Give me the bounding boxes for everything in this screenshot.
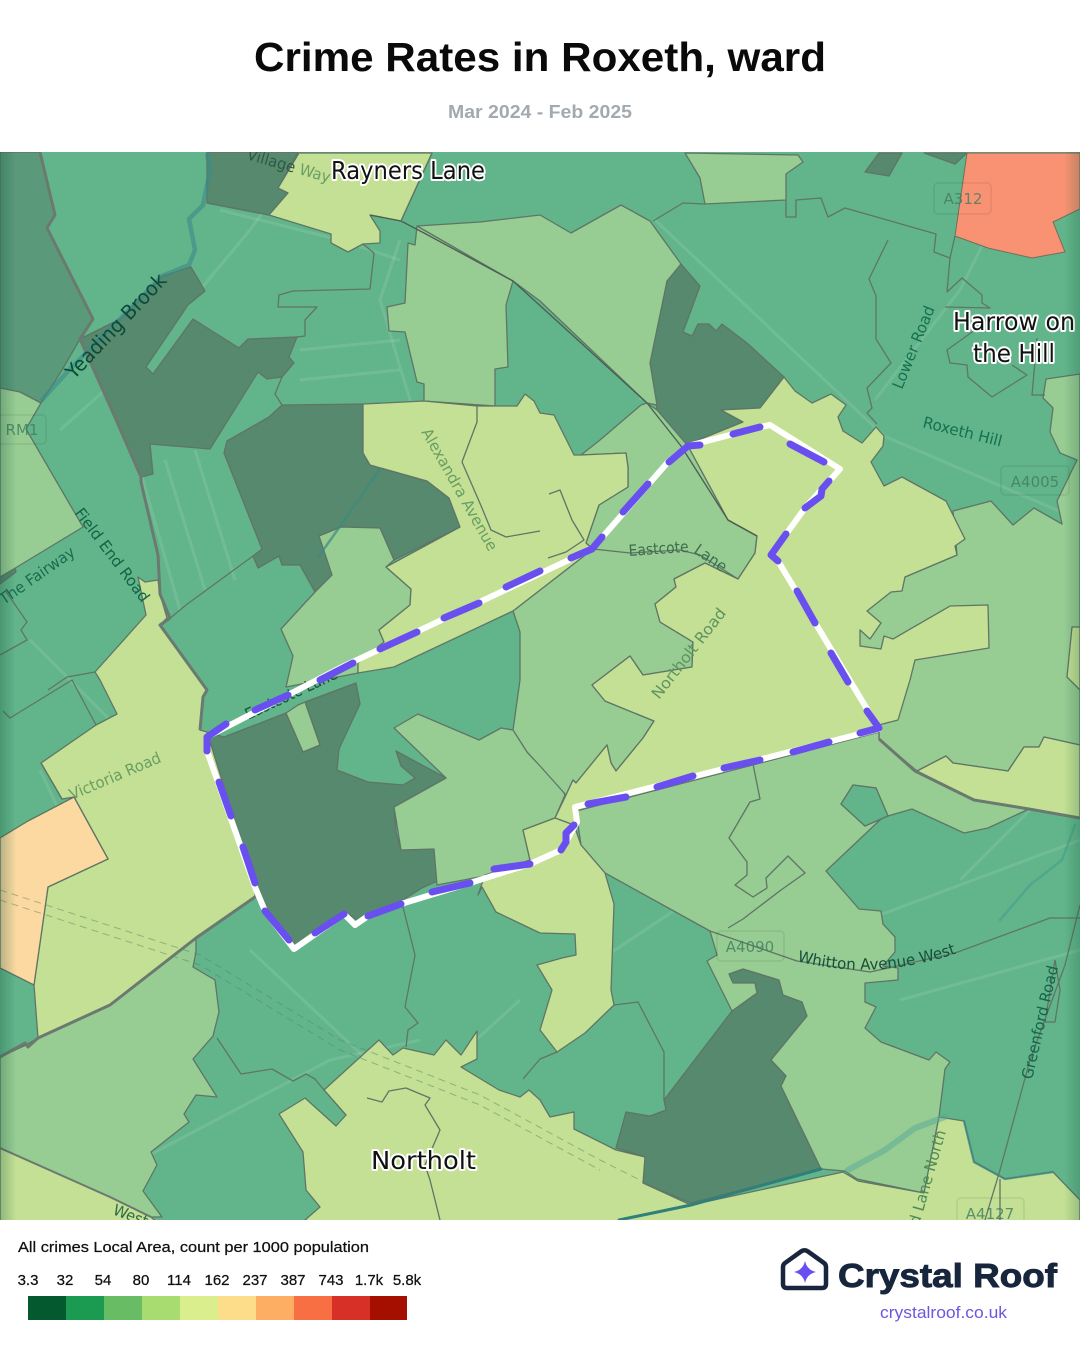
legend scale labels: 743 — [318, 1272, 344, 1289]
road label: Lower Road: Lower Road — [889, 303, 939, 391]
water: Yeading Brook — [41, 153, 210, 401]
legend scale labels: 237 — [242, 1272, 268, 1289]
legend scale labels: 387 — [280, 1272, 306, 1289]
thick borough boundary lines — [0, 152, 1080, 1217]
road label: Village Way: Village Way — [245, 146, 333, 187]
place label: Harrow on the Hill: the Hill — [973, 339, 1055, 368]
road label: Eastcote Lane east — [630, 542, 726, 572]
road badge: A4090: A4090 — [726, 938, 774, 956]
areas: orange zone — [0, 797, 108, 985]
road label: Eastcote Lane west: Eastcote Lane — [242, 665, 340, 724]
title: Crime Rates in Roxeth, ward — [254, 34, 826, 80]
legend scale labels: 5.8k — [393, 1272, 422, 1289]
rail lines — [0, 890, 690, 1205]
road badge: RM1: RM1 — [6, 421, 38, 439]
legend scale labels: 3.3 — [18, 1272, 38, 1289]
road badge: A4005 — [1001, 466, 1069, 495]
road label: Roxeth Hill: Roxeth Hill — [921, 413, 1004, 450]
legend scale labels: 80 — [133, 1272, 149, 1289]
legend colour bar — [28, 1296, 407, 1320]
mid-green patch in light zone — [841, 785, 888, 826]
areas: yellow-green zones — [0, 153, 1080, 1225]
legend scale labels: 114 — [167, 1272, 191, 1289]
boundary lines — [0, 153, 1080, 1220]
road badge: A4127 — [956, 1197, 1025, 1220]
road label: Eastcote Lane east: Lane — [691, 541, 731, 576]
legend — [18, 1239, 422, 1320]
logo: Crystal Roof — [783, 1250, 1058, 1322]
road badge: A4127: A4127 — [966, 1205, 1014, 1223]
legend scale labels: 1.7k — [355, 1272, 384, 1289]
ward boundary white outline — [207, 425, 879, 949]
road badge: A312 — [934, 183, 991, 214]
legend scale labels — [18, 1272, 422, 1289]
place label: Harrow on the Hill — [953, 310, 1075, 364]
road label: Field End Road: Field End Road — [71, 505, 153, 606]
legend scale labels: 32 — [57, 1272, 73, 1289]
ward boundary purple dashes — [207, 427, 879, 940]
road label: Eastcote Lane east: Eastcote — [628, 538, 689, 560]
road label: Lane North: d Lane North — [906, 1128, 950, 1227]
subtitle: date range: Mar 2024 - Feb 2025 — [448, 101, 632, 122]
road badge: A4090 — [717, 931, 784, 961]
road badge: RM1 — [0, 415, 46, 444]
legend scale labels: 54 — [95, 1272, 111, 1289]
road label: West: West — [111, 1201, 151, 1231]
place label: Harrow on the Hill: Harrow on — [953, 307, 1075, 336]
areas: darkest low-crime zones — [0, 152, 967, 1203]
logo icon: house with star — [783, 1250, 826, 1288]
road label: Whitton Avenue West: Whitton Avenue West — [800, 944, 956, 970]
website link text: crystalroof.co.uk — [880, 1304, 1008, 1322]
legend scale labels: 162 — [204, 1272, 230, 1289]
road label: Northolt Road: Northolt Road — [648, 605, 730, 702]
areas: high-crime salmon zone — [955, 153, 1080, 258]
map edge shading — [0, 152, 1080, 1220]
water label: Yeading Brook: Yeading Brook — [60, 268, 172, 384]
areas: light green zones — [0, 153, 1080, 1217]
ward boundary: Roxeth — [207, 425, 879, 949]
faint street network — [29, 208, 1080, 1154]
road badge: A312: A312 — [944, 190, 982, 208]
logo wordmark: Crystal Roof — [838, 1257, 1058, 1294]
road badge: A4005: A4005 — [1011, 473, 1059, 491]
road label: Greenford Road: Greenford Road — [1018, 964, 1062, 1081]
water: streams — [319, 470, 1075, 1220]
road label: Alexandra Avenue: Alexandra Avenue — [418, 425, 501, 554]
legend title: All crimes Local Area, count per 1000 population — [18, 1239, 369, 1256]
place label: Northolt: Northolt — [371, 1146, 476, 1175]
place label: Rayners Lane: Rayners Lane — [331, 156, 485, 185]
road label: Victoria Road: Victoria Road — [67, 749, 164, 804]
